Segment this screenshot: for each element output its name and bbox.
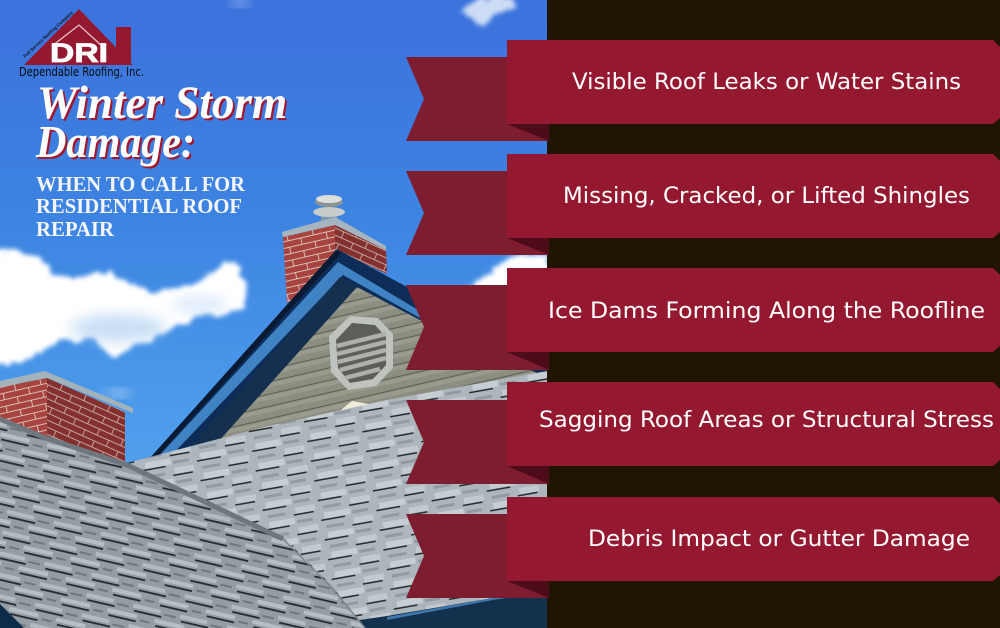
logo: Dependable Roofing [19, 9, 144, 79]
ribbon tail [406, 400, 549, 484]
ribbon 5 [406, 497, 1000, 598]
ribbon 2 [406, 154, 1000, 255]
ribbon fold [507, 124, 549, 141]
title: Winter Storm [37, 77, 287, 129]
ribbon tail [406, 57, 549, 141]
ribbon body [507, 497, 1000, 581]
clouds [0, 0, 550, 397]
gable with soffit and siding [150, 249, 548, 470]
ribbon fold [507, 352, 549, 370]
ribbon tail [406, 285, 549, 370]
ribbon fold [507, 238, 549, 255]
subtitle: RESIDENTIAL ROOF [36, 194, 242, 218]
ribbon label: Missing, Cracked, or Lifted Shingles [563, 184, 970, 209]
corner of dark roof bottom-left [0, 604, 24, 628]
title: Damage: [35, 116, 195, 167]
logo roof triangle [24, 9, 133, 65]
gutter at the bottom [360, 598, 547, 628]
ribbon 3 [406, 268, 1000, 370]
ribbon 1 [406, 40, 1000, 141]
subtitle: REPAIR [36, 217, 115, 241]
back roof shingles [127, 371, 547, 621]
ribbon tail [406, 171, 549, 255]
ribbon body [507, 382, 1000, 466]
logo tagline: Full Service Roofing Company [22, 10, 74, 59]
ribbon body [507, 268, 1000, 352]
subtitle: WHEN TO CALL FOR [36, 172, 246, 196]
sky [0, 0, 547, 628]
logo company name: Dependable Roofing, Inc. [19, 65, 144, 79]
ribbon fold [507, 581, 549, 598]
title [35, 77, 287, 167]
subtitle [36, 172, 246, 241]
inner house outline [52, 25, 102, 46]
ribbon tail [406, 514, 549, 598]
ribbon body [507, 154, 1000, 238]
ribbon label: Visible Roof Leaks or Water Stains [572, 70, 961, 95]
ribbon 4 [406, 382, 1000, 484]
vent cap [313, 195, 345, 222]
logo letters: DRI [50, 38, 108, 68]
ribbon body [507, 40, 1000, 124]
ribbon label: Ice Dams Forming Along the Roofline [548, 299, 985, 324]
photo: house roof against blue sky [0, 0, 550, 628]
ribbon fold [507, 466, 549, 484]
left chimney [0, 371, 133, 465]
gable vent octagon [329, 316, 393, 390]
front roof shingles [0, 417, 365, 628]
ribbon label: Sagging Roof Areas or Structural Stress [539, 408, 994, 433]
logo chimney [116, 27, 131, 63]
main chimney with vent [282, 195, 387, 303]
ribbon label: Debris Impact or Gutter Damage [588, 527, 970, 552]
